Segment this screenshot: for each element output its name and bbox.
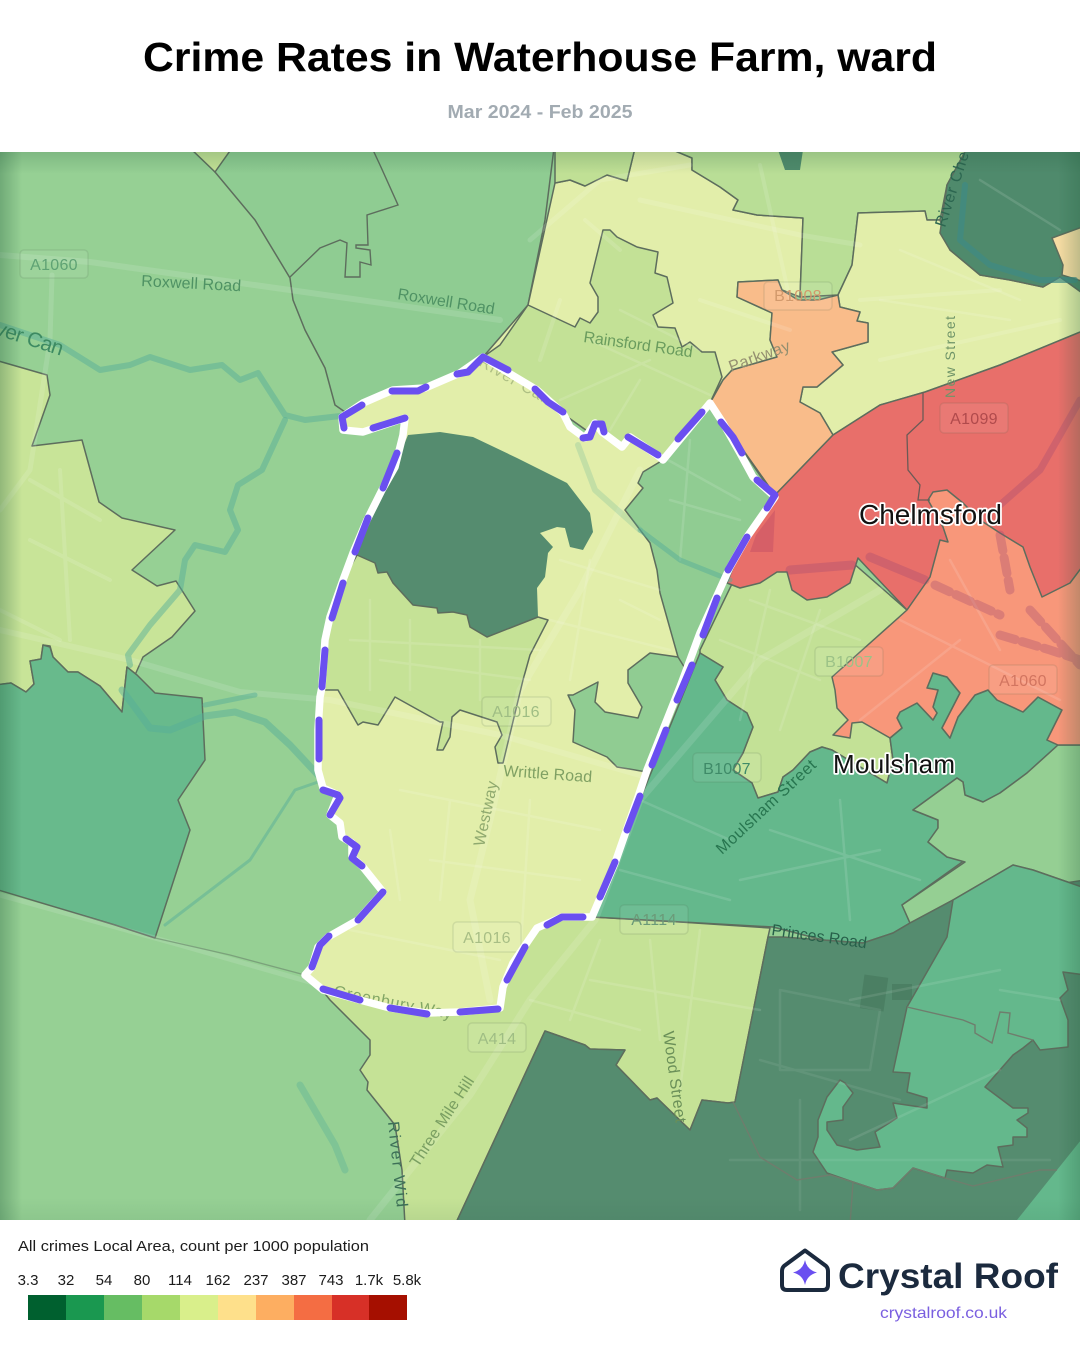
region: north-east yellow ward <box>800 211 1080 435</box>
shield: B1007 south <box>693 753 761 782</box>
shield: A1114: A1114 <box>631 912 677 929</box>
legend value labels: 237 <box>243 1272 269 1289</box>
north-west inner boundary <box>290 150 398 277</box>
title: Crime Rates in Waterhouse Farm, ward <box>143 34 937 80</box>
shield: A1016 south <box>453 922 521 952</box>
rivers <box>0 185 1075 1170</box>
internal red ward boundary <box>907 392 930 500</box>
legend value labels: 162 <box>205 1272 231 1289</box>
legend value labels: 80 <box>134 1272 150 1289</box>
label: Moulsham Street: Moulsham Street <box>713 756 820 858</box>
label: River Wid: River Wid <box>384 1121 410 1208</box>
legend <box>18 1238 422 1320</box>
region: salmon central ward <box>832 490 1080 745</box>
region: small top-left sliver <box>193 152 230 173</box>
region: south-west light area <box>318 917 770 1225</box>
place label: Moulsham: Moulsham <box>833 749 955 779</box>
region: west yellow-green ward <box>0 360 195 712</box>
legend title: All crimes Local Area, count per 1000 population <box>18 1238 369 1255</box>
region: dark southern parks <box>455 880 1080 1225</box>
label: Princes Road: Princes Road <box>770 922 868 952</box>
logo wordmark: Crystal Roof <box>838 1257 1058 1296</box>
label: River Can in ward: River Can <box>476 354 554 408</box>
region: north-west suburb <box>214 152 554 412</box>
region: light green south of city <box>699 565 906 797</box>
shield: A1099: A1099 <box>950 411 998 428</box>
website url: crystalroof.co.uk <box>880 1305 1008 1322</box>
label: Three Mile Hill: Three Mile Hill <box>407 1074 478 1170</box>
label: River Chelmer: River Che <box>933 150 973 229</box>
road and river labels <box>0 150 973 1208</box>
legend value labels: 114 <box>168 1272 192 1289</box>
map base area <box>0 152 963 1220</box>
region: small dark patch at top <box>778 152 803 170</box>
road shields <box>20 250 1057 1052</box>
legend value labels: 387 <box>281 1272 307 1289</box>
shield: A1060 south: A1060 <box>999 673 1047 690</box>
legend value labels: 1.7k <box>355 1272 384 1289</box>
region: south-east medium-green estate <box>813 865 1080 1190</box>
label: Roxwell Road west: Roxwell Road <box>141 273 242 295</box>
ward boundary outline <box>305 357 775 1014</box>
legend value labels: 743 <box>318 1272 344 1289</box>
shield: A1060 south <box>989 665 1057 694</box>
legend value labels <box>18 1272 422 1289</box>
region: bottom-right corner green <box>1017 1142 1080 1220</box>
legend value labels: 32 <box>58 1272 74 1289</box>
region: north yellow ward <box>483 148 803 440</box>
shield: B1007 north: B1007 <box>825 654 873 671</box>
ward fill: Waterhouse Farm yellow <box>310 362 677 1010</box>
place label: Chelmsford: Chelmsford <box>859 499 1002 530</box>
legend value labels: 5.8k <box>393 1272 422 1289</box>
dark park pitches <box>860 974 912 1012</box>
label: Westway: Westway <box>471 780 502 848</box>
legend value labels: 54 <box>96 1272 112 1289</box>
ward sub-area: green north-east wedge <box>625 403 775 673</box>
label: New Street: New Street <box>942 316 958 398</box>
region: top centre light green <box>555 148 635 186</box>
ward sub-area: green patch east <box>568 653 685 772</box>
legend value labels: 3.3 <box>18 1272 38 1289</box>
city centre dual carriageway bands <box>790 400 1080 665</box>
darker red block <box>750 510 775 552</box>
label: Wood Street: Wood Street <box>659 1030 689 1124</box>
ward sub-area: dark low-crime neighbourhood <box>357 432 593 637</box>
far southern boundary lines <box>733 1007 1057 1225</box>
region: western medium-green ward <box>0 645 205 938</box>
shield: A1016 north: A1016 <box>492 704 540 721</box>
faint road-line border south-west <box>155 938 305 975</box>
logo: Crystal Roof <box>782 1250 1058 1322</box>
icon: house with star <box>782 1250 828 1290</box>
boundary white base <box>305 357 775 1013</box>
shield: B1008 <box>764 282 832 310</box>
region: medium-green Moulsham wards <box>592 653 1062 943</box>
region: Chelmsford red centre <box>726 331 1080 609</box>
label: Rainsford Road: Rainsford Road <box>582 329 694 361</box>
label: Parkway: Parkway <box>727 338 793 376</box>
shield: B1007 north <box>815 647 883 676</box>
ghost road network <box>0 165 1060 1220</box>
region: Chelmer dark park <box>940 148 1080 295</box>
shield: A414 <box>468 1023 526 1052</box>
subtitle: date range: Mar 2024 - Feb 2025 <box>448 102 632 122</box>
label: Writtle Road: Writtle Road <box>503 763 593 786</box>
region: Rainsford Road light green <box>483 230 722 460</box>
shield: B1008: B1008 <box>774 288 822 305</box>
boundary purple dashes <box>312 357 775 1014</box>
region: cream corner <box>1052 226 1080 282</box>
shield: A1060 west <box>20 250 88 278</box>
ward sub-area: light-green western part <box>323 555 548 763</box>
shield: B1007 south: B1007 <box>703 761 751 778</box>
shield: A1060 west: A1060 <box>30 257 78 274</box>
legend colour scale <box>28 1295 407 1320</box>
label: Greenbury Way: Greenbury Way <box>332 983 453 1023</box>
shield: A1016 south: A1016 <box>463 930 511 947</box>
shield: A1114 <box>620 905 688 934</box>
region: orange city-north ward <box>710 280 868 495</box>
region: south-east light-green band <box>902 745 1080 923</box>
label: Roxwell Road east: Roxwell Road <box>396 286 496 318</box>
shield: A1099 <box>940 403 1008 433</box>
map edge vignette <box>0 152 1080 1220</box>
region: north light-green tongue <box>668 148 967 297</box>
shield: A414: A414 <box>478 1031 516 1048</box>
shield: A1016 north <box>482 697 551 726</box>
